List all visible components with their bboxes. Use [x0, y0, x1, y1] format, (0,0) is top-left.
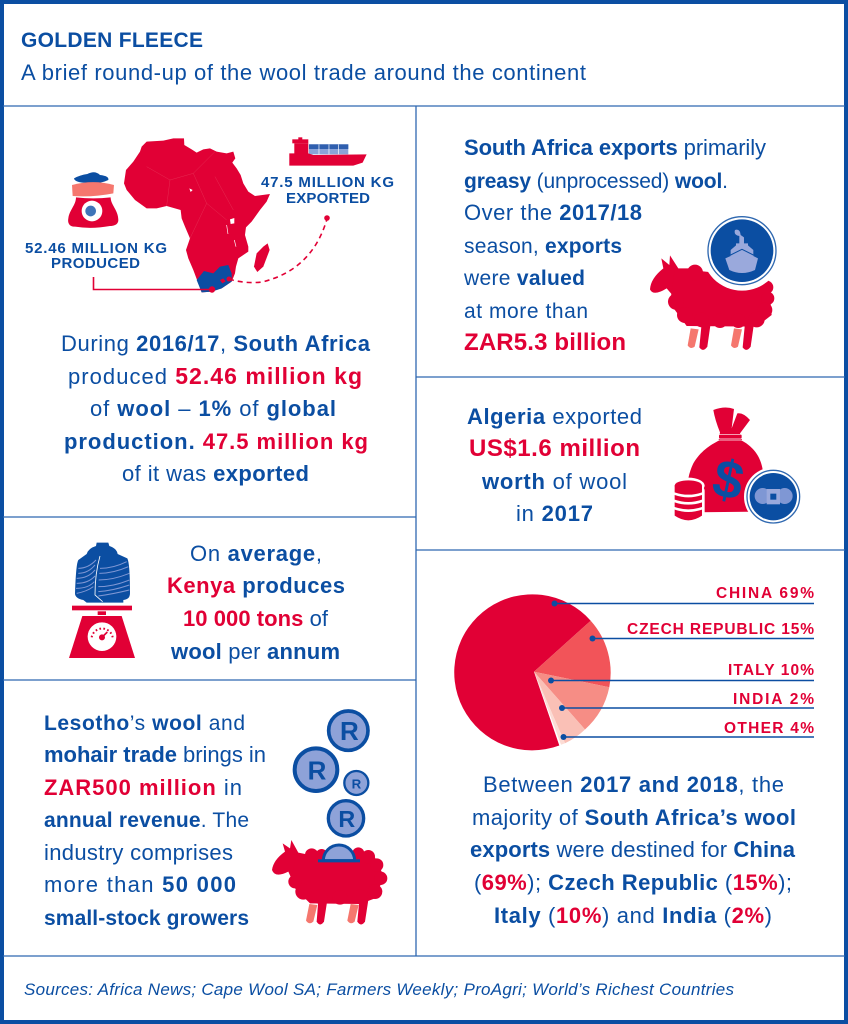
text: exports: Over the 2017/18 — [464, 200, 642, 225]
panel: Lesotho — [44, 711, 387, 930]
label: exported — [261, 174, 394, 207]
panel: South Africa exports — [463, 135, 782, 356]
chart labels: ITALY 10% — [728, 662, 814, 679]
label: exported: EXPORTED — [286, 190, 370, 207]
text: Lesotho: more than 50 000 — [44, 872, 236, 897]
text: exports: were valued — [463, 267, 585, 290]
text: exports: South Africa exports primarily — [464, 135, 766, 160]
text: export destinations: Italy (10%) and India (2%) — [494, 903, 772, 928]
text: Lesotho: ZAR500 million in — [44, 775, 242, 800]
text: Algeria — [467, 404, 642, 526]
panel: Algeria — [467, 404, 803, 526]
connector: produced — [94, 277, 215, 293]
text: exports: season, exports — [464, 235, 622, 258]
text: Lesotho: small-stock growers — [44, 907, 249, 930]
text: exports — [463, 135, 766, 356]
text: export destinations — [470, 772, 796, 928]
icon: sack of wool — [68, 172, 118, 228]
panel: South Africa production map — [25, 137, 394, 486]
icon: rand coins and sheep: R — [352, 776, 362, 791]
text: Lesotho: mohair trade brings in — [44, 742, 266, 767]
panel: export destinations — [454, 585, 814, 928]
text: South Africa production: of wool – 1% of global — [90, 396, 336, 421]
chart labels: CHINA 69% — [716, 585, 814, 602]
text: Lesotho: Lesotho’s wool and — [44, 712, 245, 735]
label: produced: PRODUCED — [51, 255, 140, 272]
text: Kenya: wool per annum — [170, 639, 340, 664]
text: Kenya: 10 000 tons of — [183, 606, 329, 631]
text: South Africa production: production. 47.5 million kg — [64, 429, 368, 454]
icon: container ship — [289, 137, 367, 166]
text: export destinations: (69%); Czech Republic (15%); — [474, 870, 792, 895]
panel: Kenya — [69, 541, 345, 664]
text: exports: ZAR5.3 billion — [464, 329, 626, 356]
text: South Africa production: of it was exported — [122, 461, 309, 486]
text: Kenya: Kenya produces — [167, 573, 345, 598]
text: South Africa production: During 2016/17, South Africa — [61, 331, 371, 356]
icon: rand coins and sheep: R — [340, 716, 359, 746]
text: Lesotho: annual revenue. The — [44, 809, 249, 832]
text: Algeria: US$1.6 million — [469, 435, 640, 462]
chart labels: INDIA 2% — [733, 691, 814, 708]
arrow: exported route — [226, 215, 330, 283]
text: Algeria: worth of wool — [481, 469, 627, 494]
text: Lesotho: industry comprises — [44, 840, 233, 865]
icon: rand coins and sheep: R — [308, 755, 327, 785]
text: South Africa production — [61, 331, 371, 486]
chart labels — [627, 585, 814, 737]
text: Lesotho — [44, 712, 266, 930]
text: export destinations: Between 2017 and 2018, the — [483, 772, 784, 797]
text: Algeria: Algeria exported — [467, 404, 642, 429]
title — [21, 29, 586, 85]
label: exported: 47.5 MILLION KG — [261, 174, 394, 191]
text: South Africa production: produced 52.46 million kg — [68, 363, 362, 389]
chart labels: CZECH REPUBLIC 15% — [627, 621, 814, 638]
label: produced: 52.46 MILLION KG — [25, 240, 167, 257]
subtitle: A brief round-up of the wool trade around the continent — [21, 60, 586, 85]
icon: sheep with ship badge — [650, 211, 782, 350]
chart leader lines — [548, 600, 814, 740]
label: produced — [25, 240, 167, 272]
text: Algeria: in 2017 — [516, 501, 593, 526]
icon: wool on scale — [69, 543, 135, 658]
text: exports: at more than — [464, 300, 588, 323]
text: Kenya — [167, 541, 345, 664]
text: export destinations: exports were destined for China — [470, 837, 796, 862]
title: GOLDEN FLEECE — [21, 29, 203, 52]
icon: rand coins and sheep — [272, 711, 387, 924]
icon: money bag with wool badge — [672, 408, 803, 526]
sources: Sources: Africa News; Cape Wool SA; Farmers Weekly; ProAgri; World’s Richest Countries — [24, 980, 734, 999]
map of Africa — [124, 138, 270, 292]
icon: money bag with wool badge: $ — [708, 448, 749, 512]
icon: rand coins and sheep: R — [338, 806, 355, 832]
text: Kenya: On average, — [190, 541, 322, 566]
pie chart — [454, 594, 611, 750]
text: export destinations: majority of South Africa’s wool — [472, 805, 796, 830]
chart labels: OTHER 4% — [724, 720, 814, 737]
text: exports: greasy (unprocessed) wool. — [464, 170, 728, 193]
